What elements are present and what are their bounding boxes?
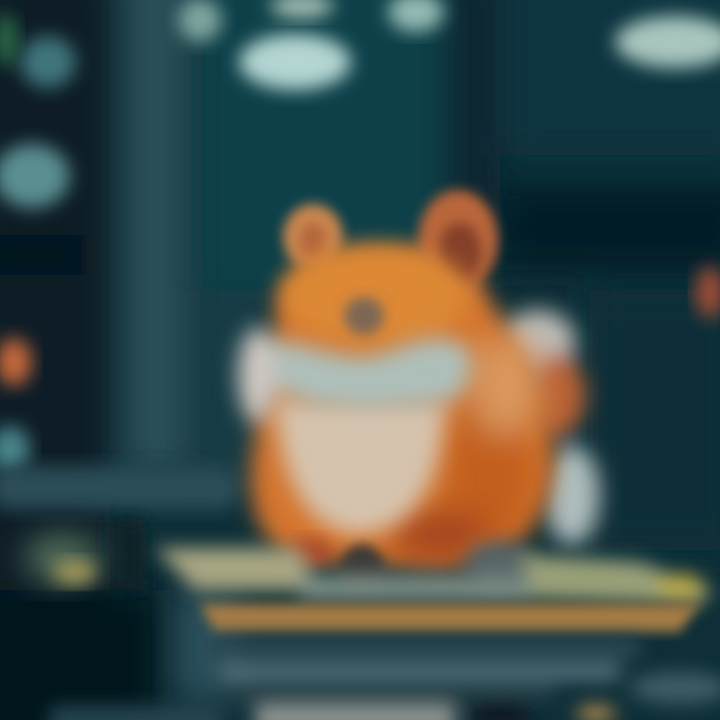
left counter shelf <box>0 466 240 700</box>
hamster <box>238 190 600 592</box>
hamster: head <box>280 245 470 345</box>
hamster: ears <box>283 190 498 290</box>
wooden table <box>155 548 712 632</box>
hamster: cream belly <box>275 400 445 535</box>
stand below table <box>50 638 720 720</box>
hamster: rear patches <box>500 310 600 545</box>
hamster: feet <box>340 544 384 592</box>
table top: light surface <box>155 548 712 604</box>
hamster: pale grey cheeks <box>238 327 472 423</box>
background lights: ceiling lamps and shelf glows <box>0 0 720 474</box>
hamster: orange body <box>250 249 552 568</box>
hamster: nose <box>344 297 384 335</box>
table edge: wood band <box>200 604 700 632</box>
